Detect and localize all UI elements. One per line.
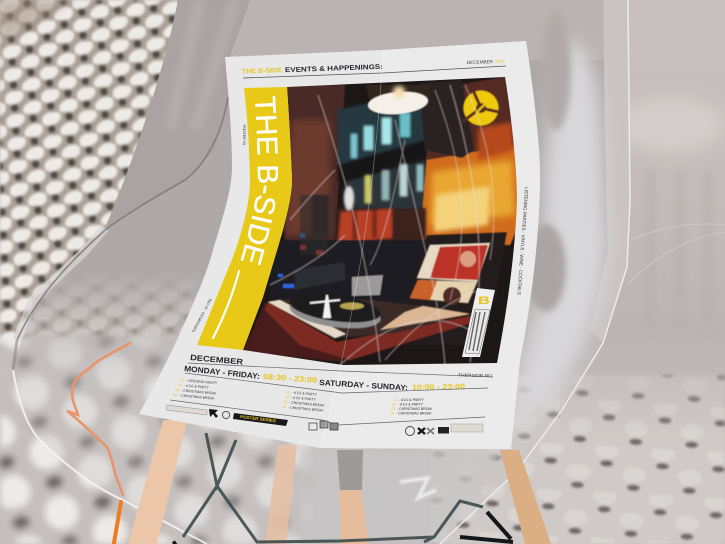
footer left badges (166, 405, 230, 419)
event list column 1: - A DJ & PARTY (184, 384, 210, 390)
event list column 2: - CHRISTMAS BREAK (288, 406, 324, 413)
poster sheet: THERSIDE.NO (458, 373, 493, 378)
hanging records (420, 80, 474, 158)
header line: DECEMBER (467, 59, 493, 65)
title underline (213, 271, 239, 338)
event list column 1: - CHRISTMAS BREAK (181, 389, 217, 396)
rims (17, 228, 105, 340)
opening hours line (184, 364, 466, 392)
poster sheet: TURNTABLES · 15 YRS (191, 298, 213, 333)
turntable deck (243, 195, 475, 362)
wooden chair legs and wire base (128, 420, 551, 544)
event list column 1: 03 (175, 388, 179, 392)
opening hours line: 10:00 - 23:00 (412, 382, 466, 392)
poster series tag: POSTER SERIES (240, 414, 276, 423)
event list column 1 (173, 378, 217, 401)
chair reflection streaks (270, 85, 494, 365)
curved title text guide (240, 96, 258, 263)
december heading: DECEMBER (190, 353, 244, 367)
right margin vertical text: LISTENING PARTIES · VINYLS · WINE · COCKTAILS (515, 187, 529, 295)
B label card (462, 288, 495, 357)
event list column 3 (390, 398, 433, 416)
header line: EVENTS & HAPPENINGS: (285, 64, 383, 74)
event list column 2: 14 (282, 405, 286, 409)
yellow title band (197, 87, 292, 350)
event list column 3: - A DJ & PARTY (399, 398, 425, 402)
poster sheet (139, 41, 540, 449)
header line: 2022 (495, 59, 506, 64)
dj lights (278, 233, 323, 288)
event list column 2: - CHRISTMAS BREAK (289, 401, 325, 408)
event list column 3: - CHRISTMAS BREAK (396, 412, 432, 416)
event list column 3: - CHRISTMAS BREAK (397, 407, 433, 411)
B label card: B (478, 295, 490, 307)
windows (336, 102, 426, 209)
footer centre icons (309, 421, 338, 430)
event list column 2: 13 (283, 400, 287, 404)
event list column 1: - OPENING NIGHT! (186, 379, 217, 385)
event list column 1: 01 (180, 378, 184, 382)
event list column 1: 02 (178, 383, 182, 387)
event list column 1: - CHRISTMAS BREAK (179, 394, 215, 401)
event list column 3: 21 (393, 398, 397, 402)
event list column 2 (282, 390, 325, 413)
event list column 1: 04 (173, 393, 177, 397)
opening hours line: SATURDAY - SUNDAY: (319, 378, 408, 392)
orange cable (67, 343, 130, 543)
event list column 2: 11 (286, 390, 290, 394)
header line: THE B-SIDE (242, 67, 283, 75)
yellow 45 adapter icon (462, 88, 503, 126)
photo of record shop (240, 70, 530, 370)
event list column 2: 12 (285, 395, 289, 399)
footer right icons (406, 424, 483, 436)
opening hours line: 08:30 - 23:00 (263, 372, 318, 385)
orange lit brick wall (420, 77, 525, 245)
event list column 3: 23 (391, 407, 395, 411)
event list column 3: 22 (392, 402, 396, 406)
vertical title: THE B-SIDE (240, 96, 278, 266)
lamp (366, 85, 430, 117)
poster fold shading (320, 50, 383, 448)
event list column 2: - A DJ & PARTY (291, 396, 317, 402)
header line (242, 59, 506, 78)
event list column 2: - A DJ & PARTY (292, 391, 318, 397)
left margin small text: POSTER V3 (242, 125, 246, 145)
poster series tag (233, 413, 288, 426)
event list column 3: - A DJ & PARTY (398, 402, 424, 406)
dj booth shadow (270, 240, 425, 305)
rim band right (590, 0, 630, 343)
opening hours line: MONDAY - FRIDAY: (184, 364, 260, 381)
event list column 3: 24 (390, 412, 394, 416)
brick wall left (285, 85, 345, 250)
bottom centre glare (300, 448, 500, 540)
inner white glare (508, 40, 608, 445)
record sleeve (400, 232, 507, 345)
bar bottles (312, 186, 426, 246)
